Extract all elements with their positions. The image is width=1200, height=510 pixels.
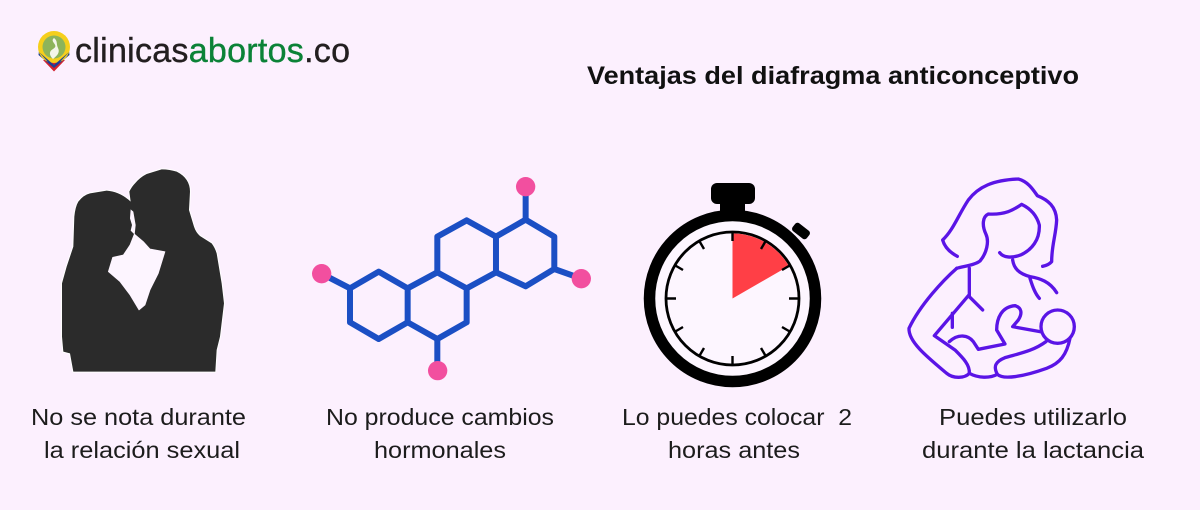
- caption: sexual relation: No se nota durante: [31, 404, 246, 430]
- title: Ventajas del diafragma anticonceptivo: [587, 62, 1079, 90]
- icon: breastfeeding mother: [909, 179, 1074, 377]
- caption: placement time: Lo puedes colocar 2: [622, 404, 852, 430]
- icon: map pin: [38, 31, 70, 72]
- baby head: [1041, 310, 1074, 343]
- caption: sexual relation: la relación sexual: [44, 437, 240, 463]
- mother arm and body: [909, 268, 983, 377]
- logo text: clinicasabortos.co: [75, 32, 350, 70]
- molecule bonds: [322, 187, 582, 371]
- stopwatch side button: [791, 222, 811, 240]
- mother hair: [943, 179, 1057, 266]
- caption: placement time: horas antes: [668, 437, 800, 463]
- stopwatch face: [650, 216, 816, 382]
- icon: couple silhouette: [62, 169, 224, 372]
- caption: hormonal changes: hormonales: [374, 437, 506, 463]
- molecule atoms: [312, 177, 591, 380]
- mother face: [957, 204, 1039, 268]
- caption: breastfeeding: Puedes utilizarlo: [939, 404, 1127, 430]
- red time sector: [732, 234, 789, 298]
- icon: molecule: [312, 177, 591, 380]
- caption: hormonal changes: No produce cambios: [326, 404, 554, 430]
- caption: breastfeeding: durante la lactancia: [922, 437, 1144, 463]
- stopwatch ticks: [666, 232, 799, 365]
- logo: clinicasabortos.co: [38, 31, 350, 72]
- stopwatch crown: [711, 183, 755, 204]
- baby body: [949, 306, 1040, 349]
- icon: stopwatch: [650, 183, 816, 382]
